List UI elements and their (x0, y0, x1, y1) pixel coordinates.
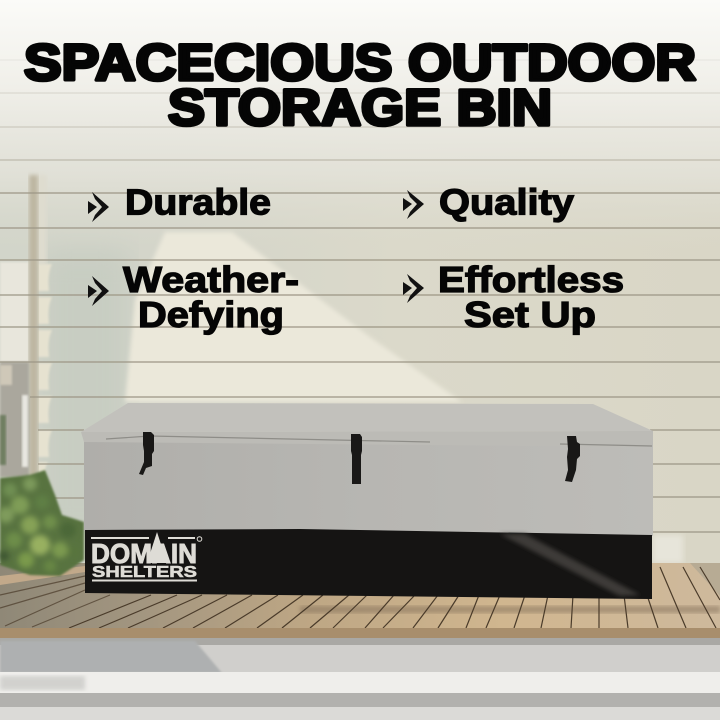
title: STORAGE BIN (168, 79, 552, 136)
feature: Effortless Set Up (403, 259, 624, 335)
feature: Effortless Set Up: Set Up (464, 294, 596, 335)
bin black base (85, 529, 652, 599)
feature: Effortless Set Up: Effortless (438, 259, 624, 300)
logo: Domain Shelters: DOMAIN (91, 538, 197, 569)
shrub (0, 470, 84, 576)
feature: Weather-Defying: Defying (138, 294, 284, 335)
deck (0, 563, 720, 638)
logo: Domain Shelters: SHELTERS (92, 564, 197, 581)
logo: Domain Shelters (91, 532, 202, 582)
concrete steps (0, 638, 720, 720)
title: SPACECIOUS OUTDOOR (24, 34, 696, 91)
feature: Quality: Quality (439, 182, 574, 222)
title (24, 34, 696, 136)
siding lines (0, 60, 720, 532)
feature: Durable: Durable (125, 182, 271, 222)
bin front panel (84, 433, 653, 536)
buckle straps (139, 432, 580, 484)
feature: Weather-Defying (88, 259, 299, 335)
bin lid top (81, 403, 653, 432)
wall background (0, 0, 720, 570)
storage bin (81, 403, 653, 599)
feature: Weather-Defying: Weather- (123, 259, 299, 300)
